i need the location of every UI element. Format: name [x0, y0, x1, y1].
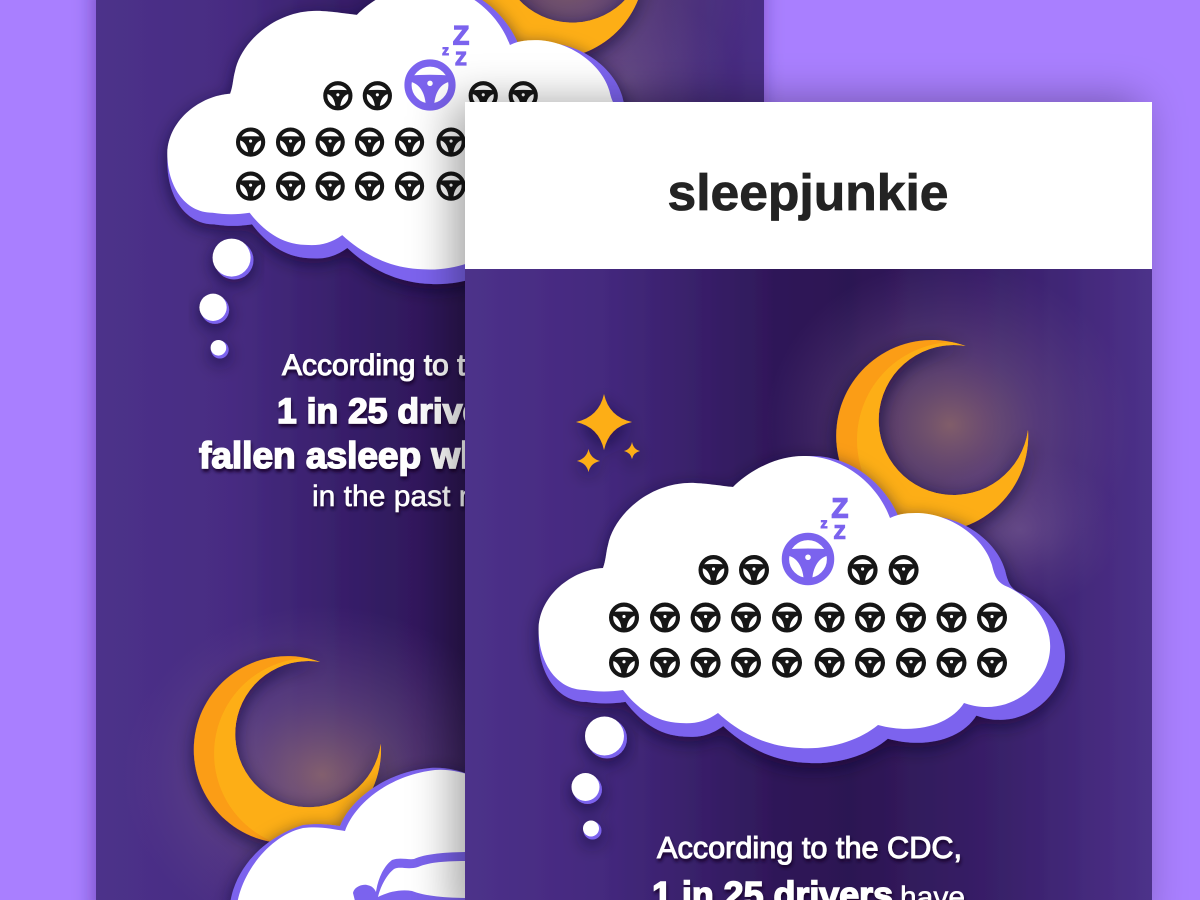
moon glow: [765, 260, 1135, 610]
second cloud with car outline: [230, 768, 470, 900]
logo wordmark: sleepjunkie: [668, 164, 948, 221]
panel: back infographic: [96, 0, 764, 900]
icon: sleeping Z letters: Z: [834, 522, 845, 542]
back statistic text: in the past month: [312, 480, 542, 513]
car outline icon: [353, 852, 470, 900]
back sleeping Z letters: Z: [453, 21, 469, 51]
header band: [465, 102, 1152, 269]
thought cloud: [539, 456, 1065, 763]
statistic text: [652, 830, 965, 900]
back sleeping Z letters: [442, 21, 469, 69]
icon: sleeping Z letters: z: [820, 515, 828, 531]
statistic text: According to the CDC,: [657, 830, 962, 865]
back statistic text: fallen asleep while driving: [199, 435, 658, 476]
second moon: [194, 656, 405, 849]
back sleeping Z letters: z: [442, 43, 449, 58]
back statistic text: [199, 349, 658, 513]
icon: stars: [576, 394, 640, 472]
back highlighted steering wheel: [408, 63, 452, 107]
back thought cloud: [167, 0, 681, 284]
back illustration: moon, cloud, steering wheels: [167, 0, 681, 359]
panel: front infographic: [465, 102, 1152, 900]
icon: highlighted steering wheel: [785, 536, 831, 582]
steering wheel rows: [611, 557, 1005, 676]
back statistic text: According to the CDC,: [282, 349, 580, 382]
icon: sleeping Z letters: [820, 492, 848, 542]
back statistic text: 1 in 25 drivers have: [277, 391, 607, 431]
back steering wheel rows: [238, 83, 622, 199]
back moon: [457, 0, 669, 65]
icon: sleeping Z letters: Z: [832, 492, 848, 524]
thought bubbles: [572, 716, 627, 840]
icon: crescent moon: [836, 340, 1053, 538]
back sleeping Z letters: Z: [455, 49, 466, 69]
back thought bubbles: [199, 239, 254, 359]
